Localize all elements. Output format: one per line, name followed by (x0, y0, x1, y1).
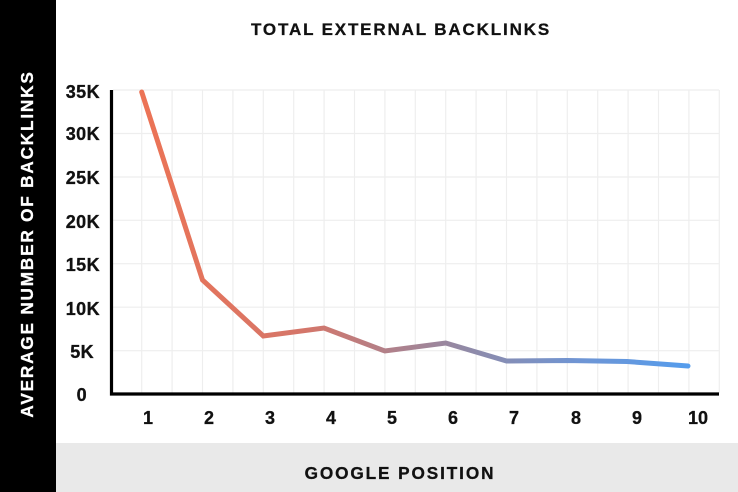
x-axis labels: 9 (632, 408, 642, 428)
y-axis labels: 20K (66, 212, 100, 232)
x-axis labels: 8 (571, 408, 581, 428)
y-axis labels: 35K (66, 82, 100, 102)
x-axis labels: 10 (688, 408, 708, 428)
x-axis labels: 6 (448, 408, 458, 428)
x-axis labels: 5 (387, 408, 397, 428)
data line (142, 92, 688, 366)
chart title: TOTAL EXTERNAL BACKLINKS (251, 20, 551, 39)
x-axis labels (143, 408, 708, 428)
y-axis labels: 25K (66, 168, 100, 188)
x-axis labels: 1 (143, 408, 153, 428)
y-axis labels: 15K (66, 255, 100, 275)
x-axis title band: GOOGLE POSITION (305, 463, 495, 483)
x-axis labels: 3 (265, 408, 275, 428)
y-axis labels: 5K (70, 342, 94, 362)
x-axis title band (56, 443, 738, 492)
y-axis labels: 30K (66, 124, 100, 144)
x-axis labels: 4 (326, 408, 336, 428)
x-axis labels: 2 (204, 408, 214, 428)
y-axis labels: 0 (77, 385, 87, 405)
line chart (66, 82, 719, 428)
y-axis title band (0, 0, 56, 492)
y-axis labels: 10K (66, 299, 100, 319)
x-axis labels: 7 (509, 408, 519, 428)
axes (112, 90, 719, 394)
y-axis labels (66, 82, 100, 405)
y-axis title band: AVERAGE NUMBER OF BACKLINKS (17, 70, 37, 418)
